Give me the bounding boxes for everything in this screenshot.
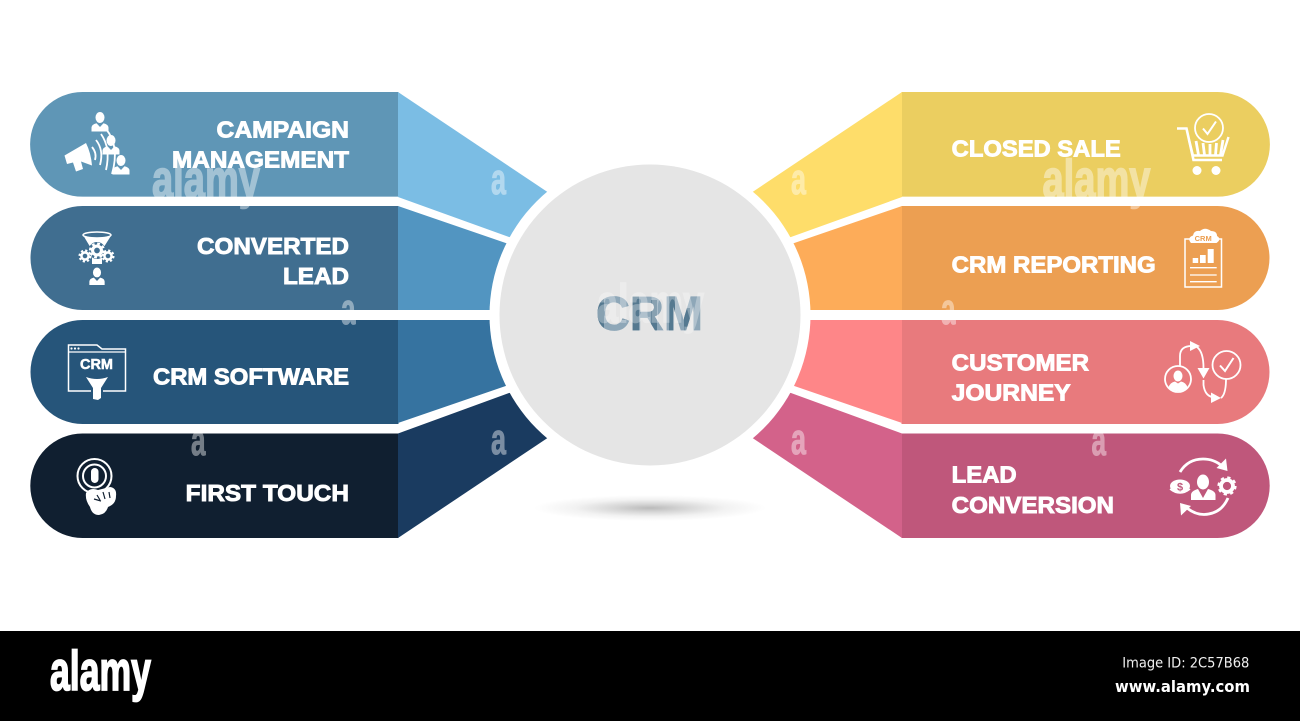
panel: campaign management: [30, 92, 620, 260]
center circle with CRM label: CRM: [596, 288, 703, 341]
panel: converted lead: [31, 206, 620, 310]
icon: lead conversion cycle: [1170, 458, 1236, 516]
watermarks: a: [491, 415, 506, 464]
watermarks: alamy: [152, 150, 260, 210]
watermarks: alamy: [597, 274, 704, 334]
icon: crm browser with funnel: [68, 345, 126, 400]
panel: customer journey: JOURNEY: [952, 379, 1071, 405]
panel: lead conversion: [680, 370, 1270, 538]
panel: crm reporting: CRM REPORTING: [952, 251, 1156, 277]
image id: Image ID: 2C57B68: [1122, 656, 1249, 672]
watermarks: a: [791, 415, 806, 464]
panel: closed sale: [680, 92, 1270, 260]
panel: crm software: [31, 320, 620, 424]
watermarks: a: [791, 155, 806, 204]
panel: first touch: [30, 370, 620, 538]
panel: first touch: FIRST TOUCH: [186, 480, 349, 506]
watermarks: [152, 150, 1150, 465]
center circle with CRM label: CRM: [596, 288, 703, 341]
panel: customer journey: CUSTOMER: [952, 349, 1089, 375]
icon: shopping cart with check: [1177, 114, 1228, 175]
icon: finger touching target: [78, 459, 116, 515]
watermarks: a: [1092, 416, 1106, 465]
icon: crm report clipboard: CRM: [1195, 234, 1212, 243]
icon: funnel with gears: [80, 232, 113, 285]
panel: crm software: CRM SOFTWARE: [153, 363, 349, 389]
panel: customer journey: [680, 320, 1270, 424]
panel: campaign management: CAMPAIGN: [216, 116, 349, 142]
panel: converted lead: CONVERTED: [197, 233, 349, 259]
panel: closed sale: CLOSED SALE: [952, 135, 1121, 161]
center circle with CRM label: [490, 154, 810, 476]
panel: lead conversion: CONVERSION: [952, 492, 1114, 518]
icon: crm report clipboard: [1185, 229, 1222, 287]
watermarks: a: [191, 416, 206, 465]
panel: converted lead: LEAD: [283, 263, 349, 289]
icon: customer journey path: [1165, 341, 1240, 403]
white gaps between bars over watermarks: [30, 197, 1270, 434]
panel: lead conversion: LEAD: [952, 461, 1017, 487]
icon: crm browser with funnel: CRM: [80, 357, 113, 373]
shadow under circle: [534, 495, 766, 521]
footer bar: [0, 631, 1300, 721]
panel: campaign management: MANAGEMENT: [172, 146, 349, 172]
watermarks: a: [491, 155, 506, 204]
website: www.alamy.com: [1115, 677, 1250, 696]
watermarks: alamy: [1042, 150, 1150, 210]
icon: megaphone and people: [64, 112, 130, 174]
panel: crm reporting: [680, 206, 1270, 310]
watermarks: a: [341, 285, 356, 334]
watermarks: a: [941, 285, 956, 334]
footer logo: alamy: [50, 639, 151, 702]
icon: lead conversion cycle: $: [1177, 482, 1183, 494]
